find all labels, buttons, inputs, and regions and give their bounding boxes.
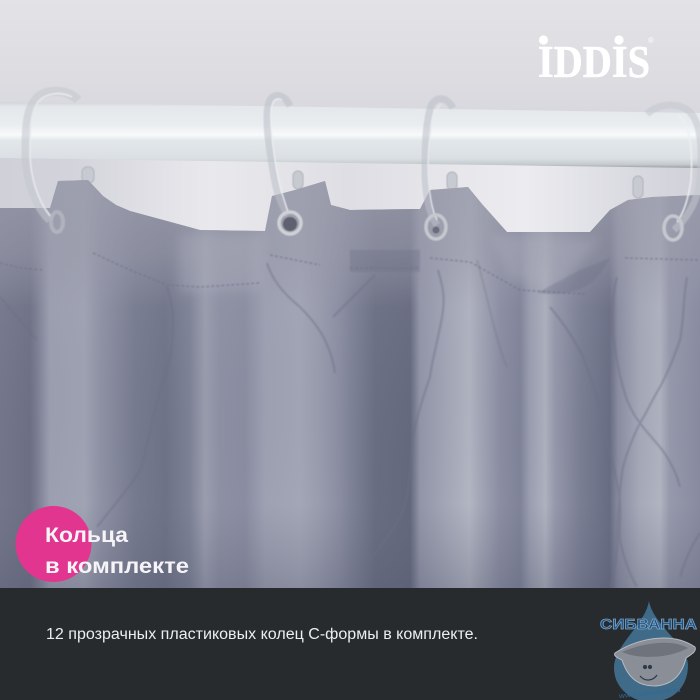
registered mark: ®	[648, 36, 654, 45]
tub inner rim	[622, 643, 688, 657]
ring 2	[267, 95, 301, 234]
description text: 12 прозрачных пластиковых колец С-формы в комплекте.	[46, 626, 478, 643]
heading: в комплекте	[45, 555, 189, 578]
brand name: СИБВАННА	[600, 617, 698, 633]
background wall	[0, 0, 700, 245]
ring 3	[425, 99, 453, 239]
bathtub face	[640, 666, 657, 680]
curtain rod	[0, 102, 700, 168]
hem shadow	[350, 250, 610, 294]
ring 4	[647, 105, 700, 240]
ring 1	[26, 91, 78, 232]
curtain rings	[26, 91, 700, 240]
heading: Кольца	[45, 524, 128, 547]
icon: water drop	[614, 601, 688, 700]
watermark logo: Сибванна	[600, 601, 698, 700]
icon: bathtub	[615, 638, 695, 686]
badge: pink circle	[16, 506, 92, 582]
translucent hem highlights	[181, 240, 590, 290]
website: www.sibvanna.ru	[617, 687, 681, 700]
bottom dark panel	[0, 588, 700, 700]
hem stitching	[0, 253, 700, 294]
wave pattern	[96, 260, 700, 586]
brand logo: IDDIS: IDDIS	[538, 37, 650, 87]
curtain fabric	[0, 170, 700, 590]
plastic pegs behind curtain	[82, 167, 643, 198]
logo dots	[539, 35, 624, 45]
